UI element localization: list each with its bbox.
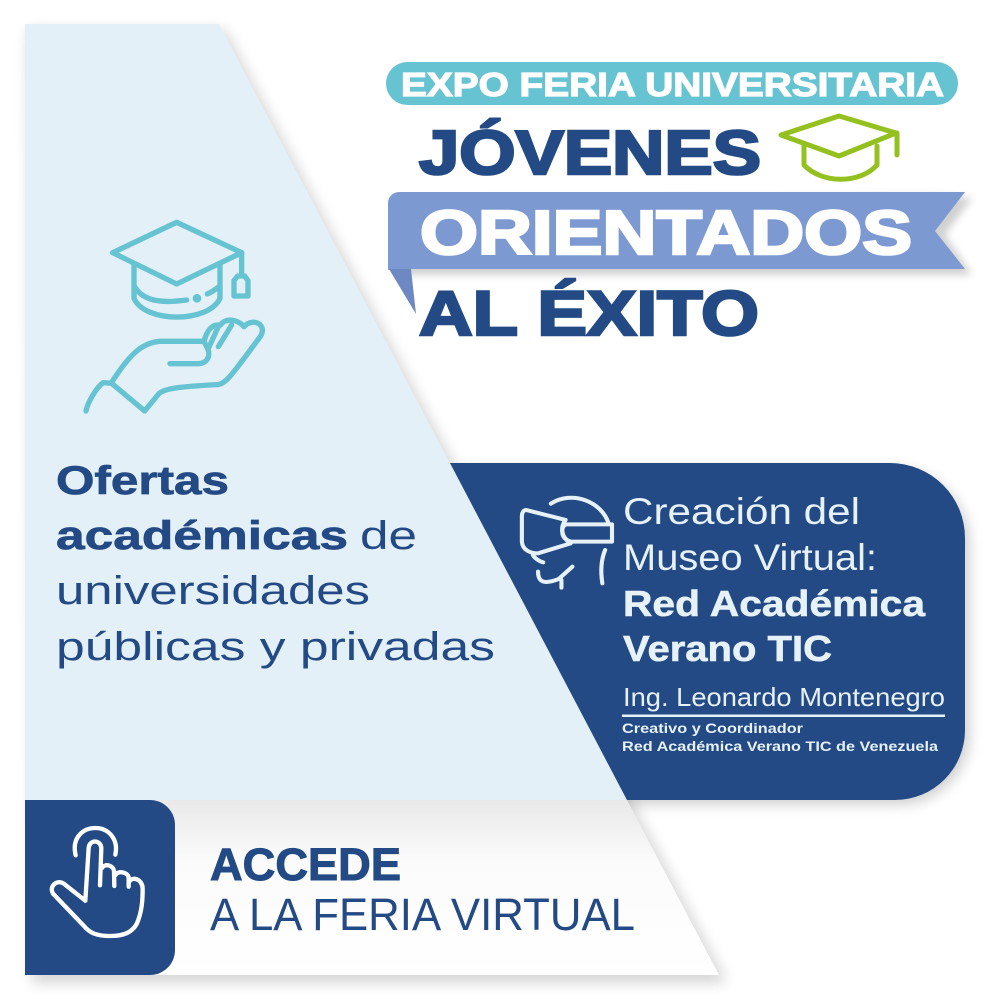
icon: pointing hand <box>52 828 143 936</box>
text: museo virtual: Creación del <box>623 491 860 532</box>
panel: call to action strip <box>25 800 719 975</box>
heading pill: EXPO FERIA UNIVERSITARIA <box>401 66 944 103</box>
text: museo virtual: Museo Virtual: <box>623 537 877 578</box>
icon: green graduation cap <box>781 116 897 179</box>
text: ofertas academicas: de <box>360 514 417 558</box>
ribbon text: ORIENTADOS <box>420 199 912 268</box>
text: presenter: Red Académica Verano TIC de Venezuela <box>622 739 939 754</box>
text: presenter: Ing. Leonardo Montenegro <box>623 682 945 712</box>
heading: al exito: AL ÉXITO <box>419 279 759 349</box>
text: accede: ACCEDE <box>210 839 401 890</box>
icon: hand holding graduation cap <box>86 222 262 411</box>
ribbon banner <box>388 192 972 314</box>
text: ofertas academicas: académicas <box>56 514 348 558</box>
panel: navy museum card <box>450 463 965 800</box>
button: navy hand tile <box>25 800 175 975</box>
text: museo virtual <box>623 491 926 669</box>
text: museo virtual: Verano TIC <box>623 628 832 669</box>
text: ofertas academicas: públicas y privadas <box>56 625 495 669</box>
text: accede: A LA FERIA VIRTUAL <box>210 889 635 940</box>
text: accede <box>210 839 635 940</box>
text: presenter: Creativo y Coordinador <box>622 721 804 736</box>
text: presenter <box>622 682 945 754</box>
text: museo virtual: Red Académica <box>623 583 926 624</box>
icon: virtual reality headset <box>522 498 612 588</box>
heading pill <box>386 62 958 105</box>
panel: light blue triangle <box>25 24 627 800</box>
text: ofertas academicas: Ofertas <box>56 459 229 503</box>
heading: jovenes: JÓVENES <box>419 119 761 188</box>
text: ofertas academicas: universidades <box>56 569 370 613</box>
text: ofertas academicas <box>56 459 495 669</box>
